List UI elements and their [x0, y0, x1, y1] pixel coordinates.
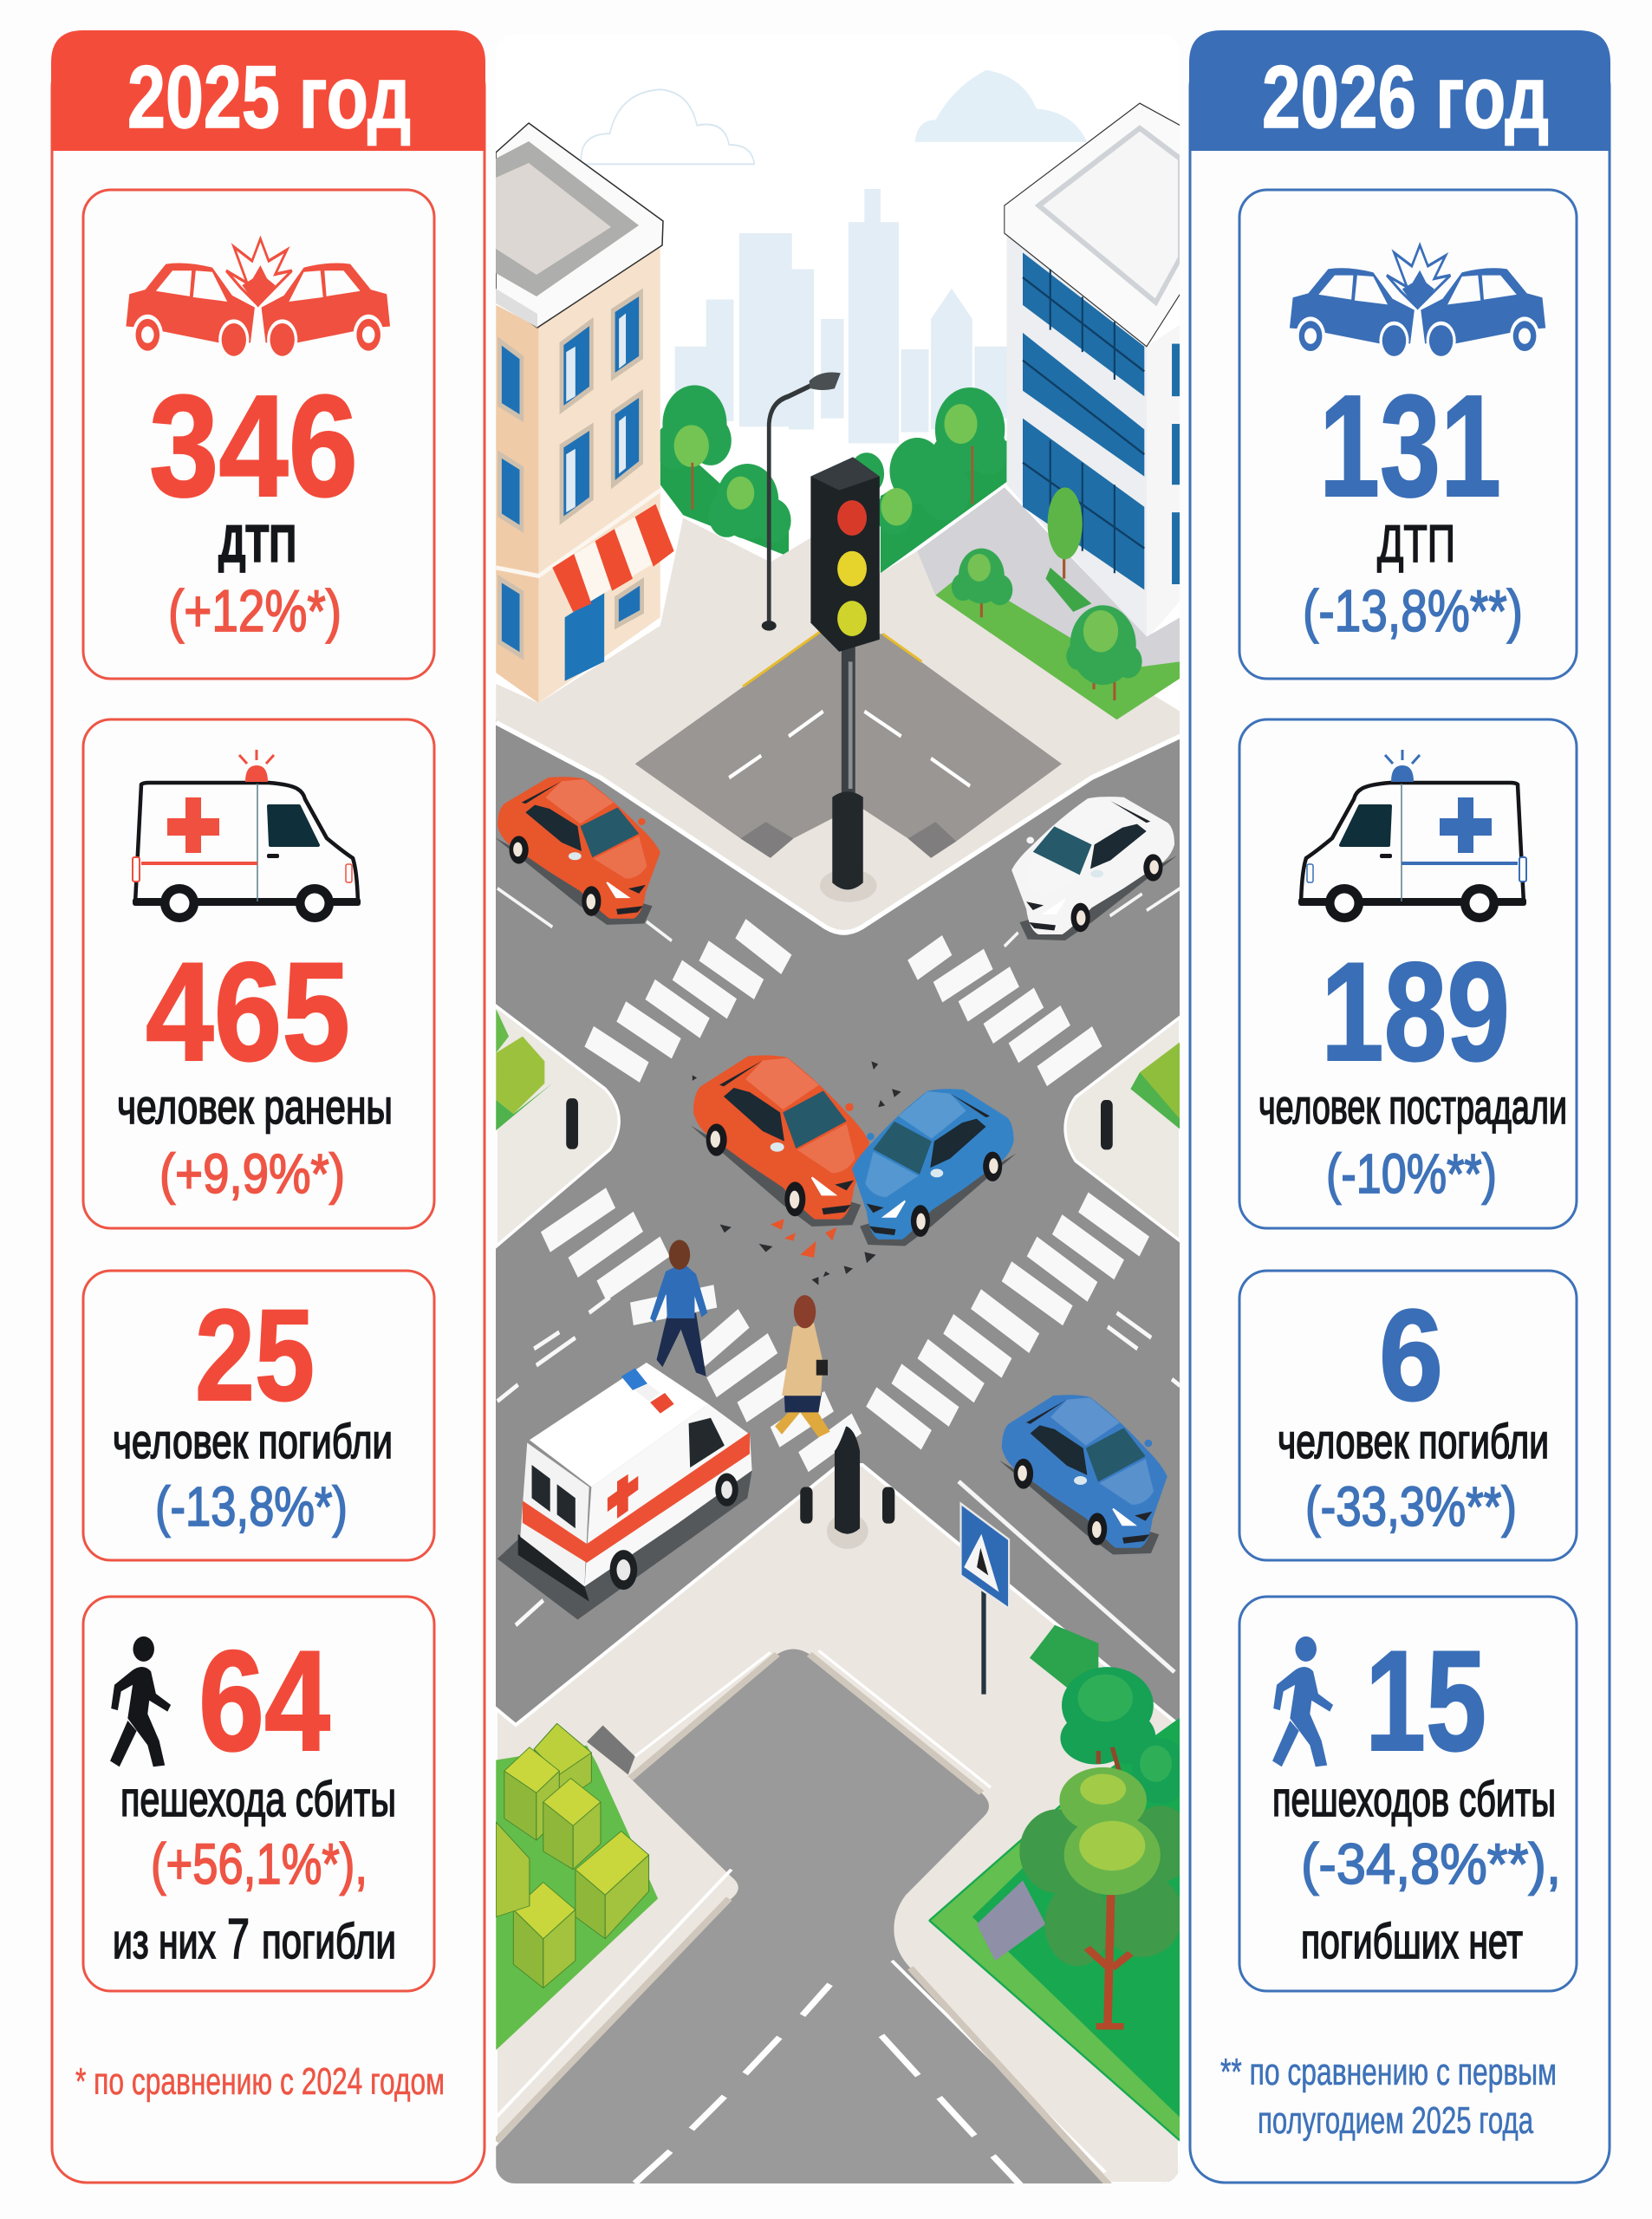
- ambulance: [498, 1363, 752, 1620]
- road sign: pedestrian crossing: [961, 1504, 1009, 1695]
- traffic light: [810, 457, 880, 902]
- card: accidents 2026: [1239, 190, 1577, 679]
- car: blue crashed: [852, 1089, 1017, 1246]
- icon: crashed cars: [126, 239, 390, 360]
- street lamp: [762, 372, 841, 631]
- heading 2025: 2025 год: [127, 48, 411, 146]
- pedestrian: woman: [775, 1295, 830, 1437]
- card: deaths 2025: [83, 1271, 434, 1560]
- number 346: 346: [149, 366, 358, 527]
- building: left tan house: [496, 123, 663, 703]
- label: человек ранены: [117, 1079, 393, 1134]
- panel frame: [1190, 52, 1610, 2183]
- panel frame: [52, 52, 485, 2183]
- number 465: 465: [146, 934, 350, 1090]
- top sidewalk and parking area: [496, 517, 1180, 933]
- illustration: road intersection: [495, 35, 1193, 2190]
- change: (-13,8%**): [1303, 578, 1523, 644]
- car: blue lower: [999, 1395, 1167, 1555]
- number 189: 189: [1321, 934, 1510, 1090]
- change: (-13,8%*): [155, 1475, 348, 1538]
- label: пешехода сбиты: [120, 1772, 396, 1827]
- change: (+9,9%*): [159, 1142, 345, 1205]
- card: deaths 2026: [1239, 1271, 1577, 1560]
- icon: ambulance: [133, 750, 361, 922]
- icon: walking person: [1272, 1637, 1333, 1767]
- heading 2026: 2026 год: [1262, 48, 1549, 146]
- car: white upper: [1011, 797, 1177, 940]
- panel: 2025: [51, 30, 485, 2183]
- deaths among pedestrians: из них: [113, 1914, 216, 1969]
- icon: walking person: [110, 1637, 171, 1767]
- card: pedestrians 2025: [83, 1597, 434, 1991]
- footnote 2025: * по сравнению с 2024 годом: [75, 2060, 445, 2103]
- lower road with dashes: [496, 1650, 1115, 2190]
- number 131: 131: [1319, 366, 1501, 527]
- icon: ambulance: [1298, 750, 1526, 922]
- change: (+12%*): [168, 578, 341, 644]
- change: (-33,3%**): [1305, 1475, 1517, 1538]
- number 6: 6: [1379, 1282, 1443, 1428]
- label: ДТП: [218, 515, 296, 573]
- footnote 2026: полугодием 2025 года: [1258, 2099, 1533, 2142]
- number 64: 64: [198, 1621, 330, 1780]
- number 25: 25: [195, 1282, 315, 1428]
- car: orange upper: [495, 777, 660, 925]
- change: (+56,1%*),: [151, 1832, 367, 1896]
- lawn and hedges bottom left: [496, 1723, 658, 2050]
- change: (-10%**): [1326, 1142, 1497, 1205]
- post and bollards at corner: [800, 1426, 894, 1549]
- footnote 2026: [1220, 2051, 1557, 2142]
- panel header: [1189, 30, 1610, 151]
- no pedestrian deaths: погибших нет: [1301, 1914, 1523, 1969]
- deaths among pedestrians: [113, 1907, 396, 1970]
- panel header: [51, 30, 485, 151]
- sky and skyline: [581, 70, 1087, 443]
- label: человек погибли: [113, 1414, 393, 1468]
- card: injured 2026: [1239, 719, 1577, 1228]
- side sidewalks with bollards: [496, 1006, 1180, 1246]
- zebra crossings: [498, 928, 1180, 1625]
- lane markings near upper cars: [498, 888, 1180, 947]
- solid road line: [959, 1481, 1174, 1672]
- label: ДТП: [1377, 515, 1455, 573]
- facade: [496, 247, 660, 703]
- card: pedestrians 2026: [1239, 1597, 1577, 1991]
- change: (-34,8%**),: [1301, 1832, 1561, 1896]
- number 15: 15: [1365, 1621, 1486, 1780]
- pedestrian: man: [650, 1240, 707, 1376]
- card: accidents 2025: [83, 190, 434, 679]
- car: orange crashed: [691, 1055, 869, 1227]
- icon: crashed cars: [1290, 245, 1545, 360]
- deaths among pedestrians: погибли: [262, 1914, 396, 1969]
- roof with parapet: [496, 123, 663, 328]
- lower sidewalk: [496, 1465, 1180, 2183]
- card: injured 2025: [83, 719, 434, 1228]
- deaths among pedestrians: 7: [227, 1907, 250, 1970]
- debris from collision: [693, 1061, 901, 1285]
- label: человек погибли: [1278, 1414, 1549, 1468]
- plaza, lawn and small trees by the office: [917, 487, 1180, 719]
- panel: 2026: [1189, 30, 1610, 2183]
- trees behind the road: [654, 385, 1008, 573]
- building: right glass office: [1005, 103, 1180, 640]
- awning with red stripes: [552, 504, 674, 612]
- lawn and trees bottom right: [931, 1625, 1193, 2139]
